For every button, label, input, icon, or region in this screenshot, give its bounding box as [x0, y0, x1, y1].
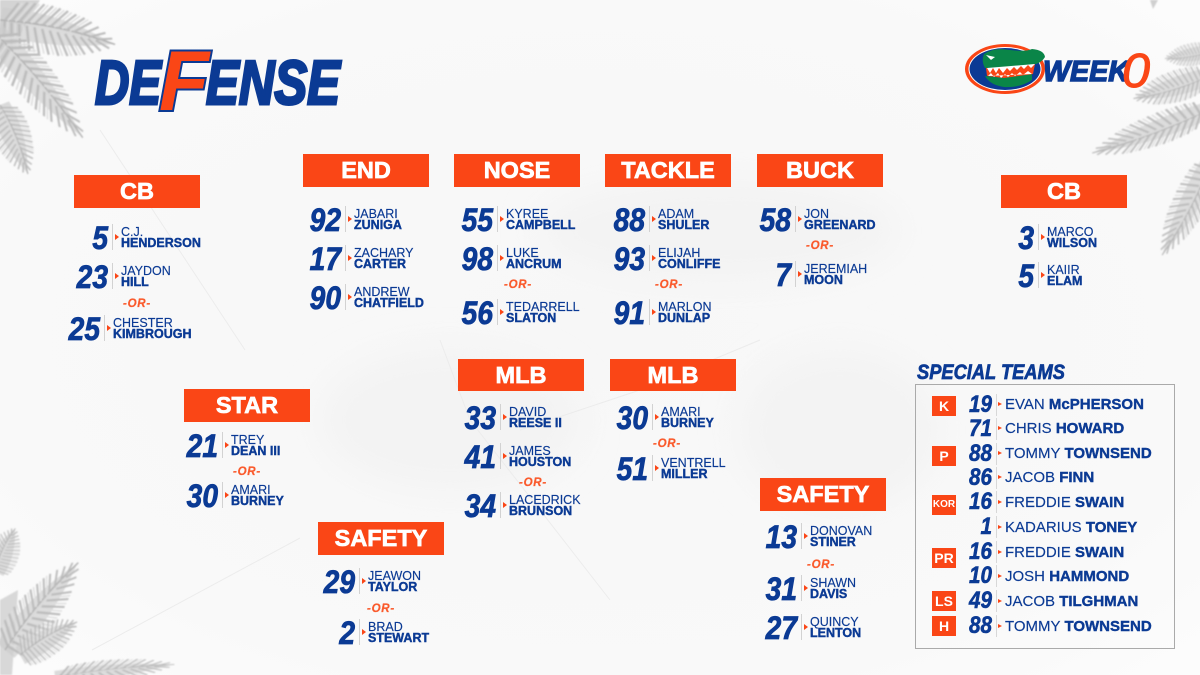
row 88: 88: [969, 612, 992, 639]
panel: special teams: [915, 360, 1175, 650]
row 1: [915, 516, 1173, 538]
player 25: KIMBROUGH: [113, 327, 191, 341]
player 93: [614, 241, 720, 277]
row 1: KADARIUS TONEY: [1005, 518, 1137, 536]
or: -OR-: [807, 559, 835, 571]
player 98: ANCRUM: [506, 257, 562, 271]
player 30: [186, 478, 284, 514]
row 88: TOMMY TOWNSEND: [1005, 618, 1152, 634]
row 19: 19: [969, 390, 992, 418]
row 49: [915, 590, 1173, 612]
player 17: [310, 241, 414, 277]
player 25: 25: [69, 311, 100, 347]
player 91: 91: [614, 295, 645, 331]
badge LS: [932, 591, 956, 611]
player 17: 17: [310, 241, 341, 277]
player 56: SLATON: [506, 311, 556, 325]
player 5: [1018, 258, 1082, 294]
heading: STAR: STAR: [216, 392, 278, 418]
player 3: WILSON: [1047, 236, 1097, 250]
player 56: [462, 295, 580, 331]
or: -OR-: [233, 466, 261, 478]
player 30: BURNEY: [231, 494, 284, 508]
row 49: 49: [969, 587, 992, 614]
player 7: 7: [775, 257, 791, 293]
row 88: [915, 615, 1173, 637]
player 31: DAVIS: [810, 587, 847, 601]
player 25: CHESTER: [113, 316, 173, 330]
player 3: 3: [1018, 220, 1034, 256]
player 88: SHULER: [658, 218, 709, 232]
player 92: ZUNIGA: [354, 218, 402, 232]
player 88: 88: [614, 202, 645, 238]
player 2: 2: [339, 615, 355, 651]
panel: STAR: [184, 389, 310, 514]
player 93: 93: [614, 241, 645, 277]
player 25: [68, 311, 191, 347]
player 27: [761, 614, 891, 640]
heading: END: [303, 154, 429, 186]
player 23: 23: [77, 259, 108, 295]
heading: MLB: [610, 358, 736, 391]
player 91: [614, 295, 711, 331]
player 31: 31: [766, 571, 797, 607]
player 5: HENDERSON: [121, 236, 201, 250]
player 21: DEAN III: [231, 444, 280, 458]
panel: BUCK: [757, 154, 883, 293]
player 56: 56: [462, 295, 493, 331]
panel: END: [303, 154, 429, 316]
player 30: 30: [617, 400, 648, 436]
player 7: JEREMIAH: [804, 262, 867, 276]
row 49: JACOB TILGHMAN: [1005, 592, 1138, 610]
heading: TACKLE: [605, 154, 731, 186]
player 98: [462, 241, 562, 277]
or: -OR-: [504, 279, 532, 291]
player 34: 34: [465, 488, 496, 524]
panel: MLB 2: [610, 359, 736, 487]
player 41: HOUSTON: [509, 455, 571, 469]
row 19: [915, 394, 1173, 416]
badge PR: PR: [934, 550, 954, 566]
badge P: [932, 446, 956, 466]
badge P: P: [939, 448, 949, 464]
player 13: [766, 519, 872, 555]
player 13: 13: [766, 519, 797, 555]
player 58: JON: [804, 206, 829, 220]
player 98: LUKE: [506, 246, 539, 260]
player 58: [760, 202, 876, 238]
player 55: KYREE: [506, 206, 548, 220]
player 92: 92: [310, 202, 341, 238]
heading: CB: CB: [1047, 178, 1081, 204]
player 30: AMARI: [231, 482, 271, 496]
player 55: [462, 202, 576, 238]
player 5: KAIIR: [1047, 262, 1080, 276]
player 41: [464, 439, 571, 475]
badge K: [932, 396, 956, 416]
player 5: 5: [1018, 258, 1034, 294]
player 29: [322, 564, 421, 600]
heading: NOSE: NOSE: [484, 157, 550, 183]
badge H: H: [939, 618, 949, 634]
player 17: CARTER: [354, 257, 406, 271]
row 16: [915, 491, 1173, 513]
title: DEFENSE wordmark: [94, 46, 343, 116]
badge H: [932, 616, 956, 636]
row 10: [915, 565, 1173, 587]
row 16: [915, 541, 1173, 563]
heading: SAFETY: SAFETY: [335, 525, 427, 551]
player 23: JAYDON: [121, 264, 171, 278]
logo: gator head and WEEK 0: [965, 44, 1150, 98]
player 90: 90: [310, 280, 341, 316]
palm: top left: [0, 0, 120, 181]
player 2: STEWART: [368, 631, 429, 645]
player 5: C.J.: [121, 224, 143, 238]
player 55: 55: [462, 202, 493, 238]
player 34: [464, 488, 581, 524]
player 3: [1018, 220, 1097, 256]
heading: MLB: MLB: [496, 362, 546, 388]
player 27: LENTON: [810, 626, 861, 640]
player 56: TEDARRELL: [506, 300, 580, 314]
row 16: FREDDIE SWAIN: [1005, 494, 1124, 510]
player 51: VENTRELL: [661, 456, 726, 470]
player 23: HILL: [121, 275, 149, 289]
heading: CB: [1001, 175, 1127, 208]
badge KOR: [932, 495, 956, 515]
player 90: ANDREW: [354, 284, 410, 298]
heading: SAFETY: [760, 478, 886, 510]
player 7: [775, 257, 867, 293]
heading: CB: [74, 175, 200, 208]
row 88: 88: [969, 440, 992, 466]
player 30: AMARI: [661, 404, 701, 418]
player 90: CHATFIELD: [354, 296, 424, 310]
player 30: 30: [187, 478, 218, 514]
player 27: QUINCY: [810, 614, 859, 628]
player 3: MARCO: [1047, 224, 1094, 238]
panel: SAFETY right: [760, 478, 886, 646]
heading: STAR: [184, 389, 310, 422]
player 98: 98: [462, 241, 493, 277]
player 31: SHAWN: [810, 576, 856, 590]
or: -OR-: [367, 603, 395, 615]
player 93: ELIJAH: [658, 246, 700, 260]
or: -OR-: [655, 279, 683, 291]
player 31: [766, 571, 856, 607]
row 1: 1: [981, 513, 992, 540]
player 51: MILLER: [661, 467, 708, 481]
heading: NOSE: [454, 154, 580, 186]
player 41: 41: [465, 439, 496, 475]
player 33: REESE II: [509, 416, 562, 430]
player 33: 33: [465, 400, 496, 436]
or: -OR-: [123, 298, 151, 310]
heading: MLB: MLB: [648, 362, 698, 388]
player 29: JEAWON: [368, 568, 421, 582]
player 21: 21: [187, 428, 218, 464]
player 88: [614, 202, 710, 238]
row 16: 16: [969, 488, 992, 515]
badge PR: [932, 548, 956, 568]
row 10: 10: [969, 562, 992, 589]
or: -OR-: [806, 240, 834, 252]
player 27: 27: [766, 610, 797, 646]
or: -OR-: [519, 477, 547, 489]
player 2: [338, 615, 430, 651]
heading: BUCK: [757, 154, 883, 186]
badge K: K: [939, 398, 949, 414]
player 5: ELAM: [1047, 274, 1082, 288]
player 34: BRUNSON: [509, 504, 572, 518]
player 33: [464, 400, 562, 436]
row 71: 71: [969, 414, 992, 442]
row 19: EVAN McPHERSON: [1005, 396, 1144, 413]
row 16: 16: [969, 538, 992, 565]
player 23: [76, 259, 171, 295]
player 51: [616, 451, 726, 487]
box outline: [915, 384, 1175, 649]
panel: NOSE: [454, 154, 580, 331]
player 92: [310, 202, 402, 238]
row 88: [915, 442, 1173, 464]
player 93: CONLIFFE: [658, 257, 720, 271]
heading: TACKLE: TACKLE: [621, 157, 715, 183]
player 21: TREY: [231, 432, 264, 446]
heading: SAFETY: SAFETY: [777, 481, 869, 507]
heading: END: END: [341, 157, 391, 183]
heading: BUCK: BUCK: [786, 157, 854, 183]
row 86: 86: [969, 464, 992, 490]
player 13: STINER: [810, 535, 856, 549]
heading: special teams: SPECIAL TEAMS: [917, 360, 1065, 384]
player 88: ADAM: [658, 206, 694, 220]
badge KOR: KOR: [933, 499, 955, 510]
heading: SAFETY: [318, 522, 444, 554]
row 71: [915, 418, 1173, 440]
player 2: BRAD: [368, 620, 403, 634]
badge LS: LS: [935, 593, 953, 609]
row 71: CHRIS HOWARD: [1005, 420, 1124, 437]
player 13: DONOVAN: [810, 524, 872, 538]
panel: MLB 1: [458, 359, 584, 524]
player 34: LACEDRICK: [509, 492, 581, 506]
player 92: JABARI: [354, 206, 398, 220]
player 58: GREENARD: [804, 218, 876, 232]
player 51: 51: [617, 451, 648, 487]
icon: gator oval: [965, 44, 1045, 94]
panel: TACKLE: [605, 154, 731, 331]
panel: CB right: [1001, 175, 1127, 294]
player 91: DUNLAP: [658, 311, 710, 325]
row 86: [915, 466, 1173, 488]
player 41: JAMES: [509, 444, 551, 458]
player 30: BURNEY: [661, 416, 714, 430]
panel: CB left: [68, 175, 201, 347]
row 88: TOMMY TOWNSEND: [1005, 445, 1152, 462]
player 55: CAMPBELL: [506, 218, 575, 232]
row 86: JACOB FINN: [1005, 469, 1094, 486]
player 91: MARLON: [658, 300, 711, 314]
heading: MLB: [458, 358, 584, 391]
player 58: 58: [760, 202, 791, 238]
player 7: MOON: [804, 273, 843, 287]
or: -OR-: [653, 438, 681, 450]
player 5: [92, 220, 201, 256]
player 30: [616, 400, 714, 436]
row 10: JOSH HAMMOND: [1005, 568, 1129, 584]
text: 0: 0: [1122, 45, 1150, 98]
panel: SAFETY left: [318, 522, 444, 651]
player 21: [186, 428, 280, 464]
palm: top right: [1087, 0, 1200, 263]
player 5: 5: [92, 220, 108, 256]
player 29: 29: [324, 564, 355, 600]
text: WEEK: WEEK: [1043, 56, 1131, 88]
player 29: TAYLOR: [368, 580, 417, 594]
player 33: DAVID: [509, 404, 546, 418]
palm: bottom left: [0, 522, 176, 675]
player 90: [310, 280, 424, 316]
title: DEFENSE wordmark: DE: [95, 49, 162, 116]
heading: CB: CB: [120, 178, 154, 204]
player 17: ZACHARY: [354, 246, 414, 260]
row 16: FREDDIE SWAIN: [1005, 544, 1124, 560]
